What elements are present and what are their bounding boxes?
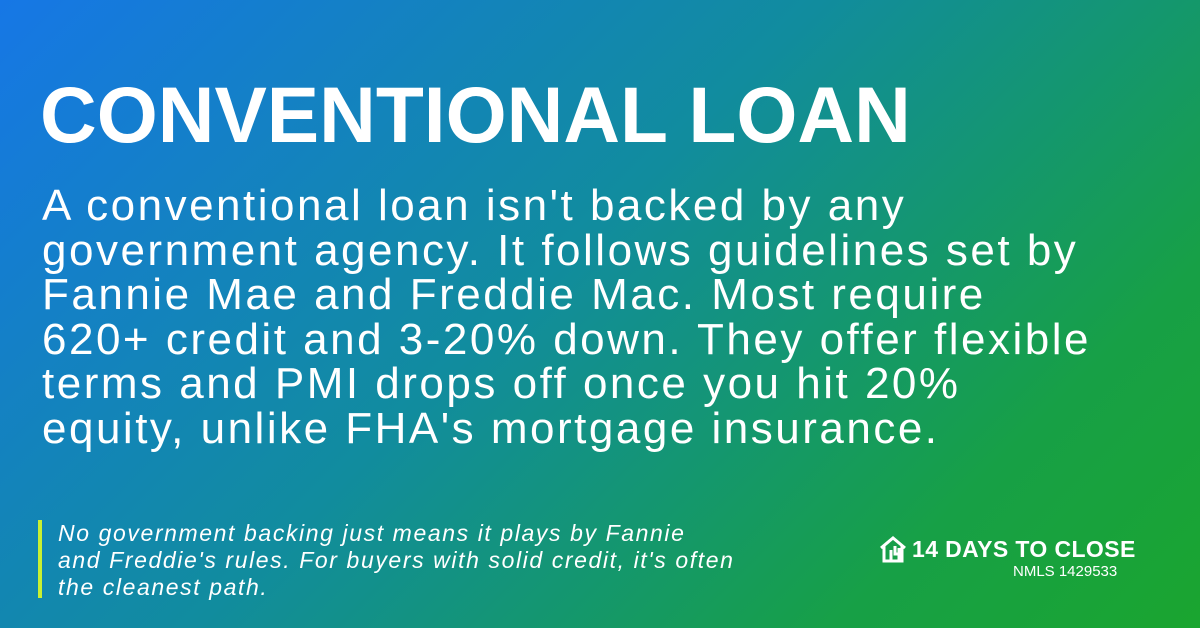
body text bbox=[42, 181, 1091, 452]
icon: house bbox=[880, 536, 906, 562]
body text: equity, unlike FHA's mortgage insurance. bbox=[42, 404, 940, 452]
callout quote bbox=[38, 520, 735, 600]
quote text: No government backing just means it plays by Fannie bbox=[58, 520, 686, 546]
quote text: and Freddie's rules. For buyers with solid credit, it's often bbox=[58, 547, 735, 573]
accent bar bbox=[38, 520, 42, 598]
quote text bbox=[58, 520, 735, 600]
body text: terms and PMI drops off once you hit 20% bbox=[42, 359, 961, 408]
NMLS: NMLS 1429533 bbox=[1013, 563, 1117, 580]
logo text: 14 DAYS TO CLOSE bbox=[912, 536, 1136, 562]
body text: Fannie Mae and Freddie Mac. Most require bbox=[42, 270, 986, 319]
title: CONVENTIONAL LOAN bbox=[40, 71, 911, 159]
body text: A conventional loan isn't backed by any bbox=[42, 181, 906, 230]
body text: government agency. It follows guidelines set by bbox=[42, 226, 1078, 274]
body text: 620+ credit and 3-20% down. They offer flexible bbox=[42, 314, 1091, 364]
quote text: the cleanest path. bbox=[58, 574, 268, 600]
logo bbox=[880, 536, 1136, 580]
